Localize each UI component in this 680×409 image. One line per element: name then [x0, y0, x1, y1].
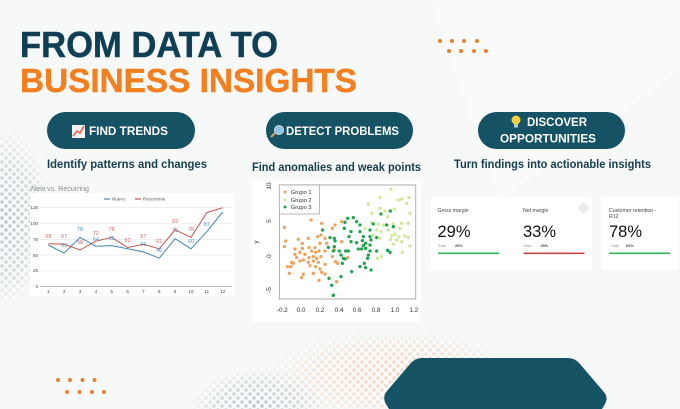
y axis labels: 25: [33, 268, 38, 273]
x axis labels: 4: [95, 289, 98, 294]
line chart panel: 75: [172, 228, 178, 234]
value labels: 78: [188, 227, 194, 233]
kpi panel: gross and net margin: [431, 197, 592, 270]
y axis labels: 75: [33, 237, 38, 242]
x axis labels: 3: [79, 289, 82, 294]
value labels: 72: [93, 231, 99, 237]
x axis labels: [47, 289, 226, 294]
series: nuevo: [48, 212, 223, 258]
y axis labels: 50: [33, 253, 38, 258]
line chart panel: [30, 184, 234, 296]
line chart panel: 64: [93, 237, 99, 243]
value labels: 58: [77, 240, 83, 246]
pill: discover opportunities: OPPORTUNITIES: [500, 132, 596, 146]
text: identify patterns: Identify patterns and changes: [47, 157, 207, 171]
kpi: gross margin: [438, 208, 499, 254]
title: BUSINESS INSIGHTS: [20, 63, 357, 100]
x axis labels: 0.4: [335, 307, 344, 314]
title: FROM DATA TO: [20, 24, 278, 65]
kpi: net margin: [523, 208, 584, 254]
x axis labels: 0.2: [316, 307, 325, 314]
pill: discover opportunities: DISCOVER: [527, 115, 587, 129]
y axis labels: [253, 182, 273, 293]
x axis labels: 11: [204, 289, 210, 294]
icon: trend chart: [72, 125, 85, 138]
x axis labels: 0.0: [297, 307, 306, 314]
icon: magnifier: [271, 126, 284, 137]
value labels: 67: [140, 234, 146, 240]
value labels: 78: [109, 227, 115, 233]
y axis labels: [30, 205, 38, 289]
kpi panel: customer retention: R12: [609, 214, 619, 220]
x axis labels: 12: [220, 289, 226, 294]
y axis labels: 0: [35, 284, 38, 289]
x axis labels: 8: [158, 289, 161, 294]
value labels: 92: [172, 219, 178, 225]
y axis labels: 125: [30, 205, 38, 210]
y axis labels: -5: [266, 287, 273, 293]
points: grupo 2: [363, 188, 412, 260]
legend: Grupo 3: [291, 205, 312, 211]
kpi panel: customer retention: Goal: [611, 244, 619, 248]
kpi: gross margin: Gross margin: [438, 208, 469, 214]
hexagon shape: [384, 358, 607, 409]
x axis labels: 2: [63, 289, 66, 294]
line chart panel: 60: [188, 239, 194, 245]
series: recurrente: [48, 208, 223, 250]
line chart panel: 55: [140, 242, 146, 248]
text: find anomalies: Find anomalies and weak points: [252, 160, 421, 174]
legend: Grupo 2: [291, 198, 312, 204]
line chart panel: 87: [204, 222, 210, 228]
x axis labels: 0.6: [353, 307, 362, 314]
text: turn findings: Turn findings into actionable insights: [454, 157, 651, 171]
x axis labels: 1.2: [409, 307, 419, 314]
icon: light bulb: [512, 116, 520, 128]
line chart panel: 78: [77, 227, 83, 233]
value labels: [45, 219, 194, 246]
y axis labels: 0: [266, 254, 273, 258]
scatter plot panel: [251, 180, 421, 322]
x axis labels: 5: [110, 289, 113, 294]
legend: Grupo 1: [291, 190, 312, 196]
chart legend: [104, 196, 166, 202]
value labels: 67: [61, 234, 67, 240]
y axis labels: 10: [266, 182, 273, 190]
pill: discover opportunities: [478, 112, 625, 149]
y axis labels: 100: [30, 221, 38, 226]
pill: find trends: FIND TRENDS: [89, 124, 168, 138]
x axis labels: 0.8: [372, 307, 381, 314]
chart legend: Recurrente: [143, 196, 166, 202]
kpi: net margin: 35%: [540, 244, 549, 248]
line chart panel: 53: [61, 243, 67, 249]
x axis labels: 10: [188, 289, 194, 294]
points: grupo 1: [283, 218, 349, 283]
value labels: 68: [45, 234, 51, 240]
pill: detect problems: [266, 112, 413, 149]
value labels: 62: [125, 238, 131, 244]
decorative dots: bottom left: [56, 378, 106, 394]
background: [0, 138, 496, 409]
pill: detect problems: DETECT PROBLEMS: [286, 124, 399, 138]
x axis labels: 1: [47, 289, 50, 294]
x axis labels: 9: [174, 289, 177, 294]
line chart panel: 46: [156, 248, 162, 254]
kpi panel: customer retention: 78%: [609, 223, 642, 241]
kpi: net margin: Goal: [524, 244, 531, 248]
chart title: New vs. Recurring: [31, 184, 89, 193]
y axis labels: y: [253, 240, 260, 244]
title: [20, 24, 357, 100]
kpi: gross margin: 26%: [455, 244, 463, 248]
y axis labels: 5: [266, 219, 273, 223]
x axis labels: 7: [142, 289, 145, 294]
kpi: gross margin: Goal: [438, 244, 446, 248]
kpi: net margin: 33%: [523, 223, 556, 241]
chart legend: Nuevo: [112, 196, 126, 202]
line chart panel: 65: [109, 236, 115, 242]
legend: [279, 185, 319, 214]
x axis labels: 6: [126, 289, 129, 294]
x axis labels: 1.0: [391, 307, 400, 314]
kpi panel: customer retention: 62%: [626, 244, 634, 248]
kpi: net margin: Net margin: [523, 208, 548, 214]
value labels: 61: [156, 239, 162, 245]
points: grupo 3: [321, 209, 395, 297]
icon: expand: [579, 203, 589, 213]
kpi panel: customer retention: Customer retention -: [609, 208, 657, 214]
decorative dots: top right: [438, 39, 488, 53]
x axis labels: [277, 307, 419, 314]
kpi: gross margin: 29%: [438, 223, 471, 241]
x axis labels: -0.2: [277, 307, 288, 314]
kpi panel: customer retention: [601, 197, 679, 270]
pill: find trends: [47, 112, 195, 149]
